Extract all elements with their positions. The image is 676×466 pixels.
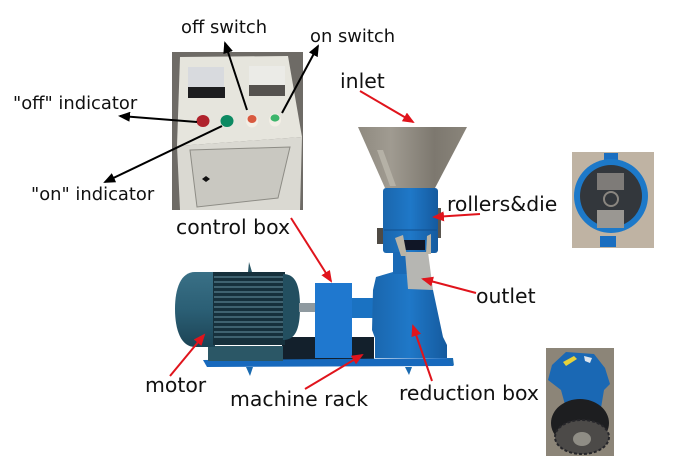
arrow: machine rack [305,355,362,389]
door latch [202,176,210,182]
meter: left [188,67,225,98]
photo: control box [172,52,303,210]
arrow: off switch [225,43,247,110]
label: off switch: off switch [181,17,267,38]
photo: rollers and die [572,152,654,248]
label: machine rack: machine rack [230,387,368,411]
shaft housing [352,298,374,318]
arrow: control box [291,218,331,281]
arrow: on indicator [105,126,222,182]
arrow: inlet [360,91,413,122]
arrow: outlet [423,279,476,293]
meter: right [249,66,285,96]
motor [175,262,316,361]
hopper [358,127,467,188]
die housing [377,188,441,253]
label: control box: control box [176,215,290,239]
label: outlet: outlet [476,284,536,308]
arrow: on switch [282,46,318,113]
label: inlet: inlet [340,69,385,93]
outlet chute [395,234,433,290]
switch: red [246,114,258,128]
arrow: motor [170,335,204,376]
arrow: reduction box [413,326,432,381]
arrow: rollers and die [434,214,480,217]
indicator: red [196,115,210,127]
reduction box [372,272,447,358]
machine [175,127,467,376]
label: rollers and die: rollers&die [447,192,557,216]
label: on indicator: "on" indicator [31,184,155,205]
coupling guard [315,283,352,358]
label: reduction box: reduction box [399,381,539,405]
label: motor: motor [145,373,207,397]
neck [393,252,423,274]
label: off indicator: "off" indicator [13,93,138,114]
indicator: green [220,115,234,127]
label: on switch: on switch [310,26,395,47]
switch: green [269,114,281,126]
photo: reduction box [546,348,614,456]
arrow: off indicator [120,116,197,122]
base rail [203,337,454,376]
